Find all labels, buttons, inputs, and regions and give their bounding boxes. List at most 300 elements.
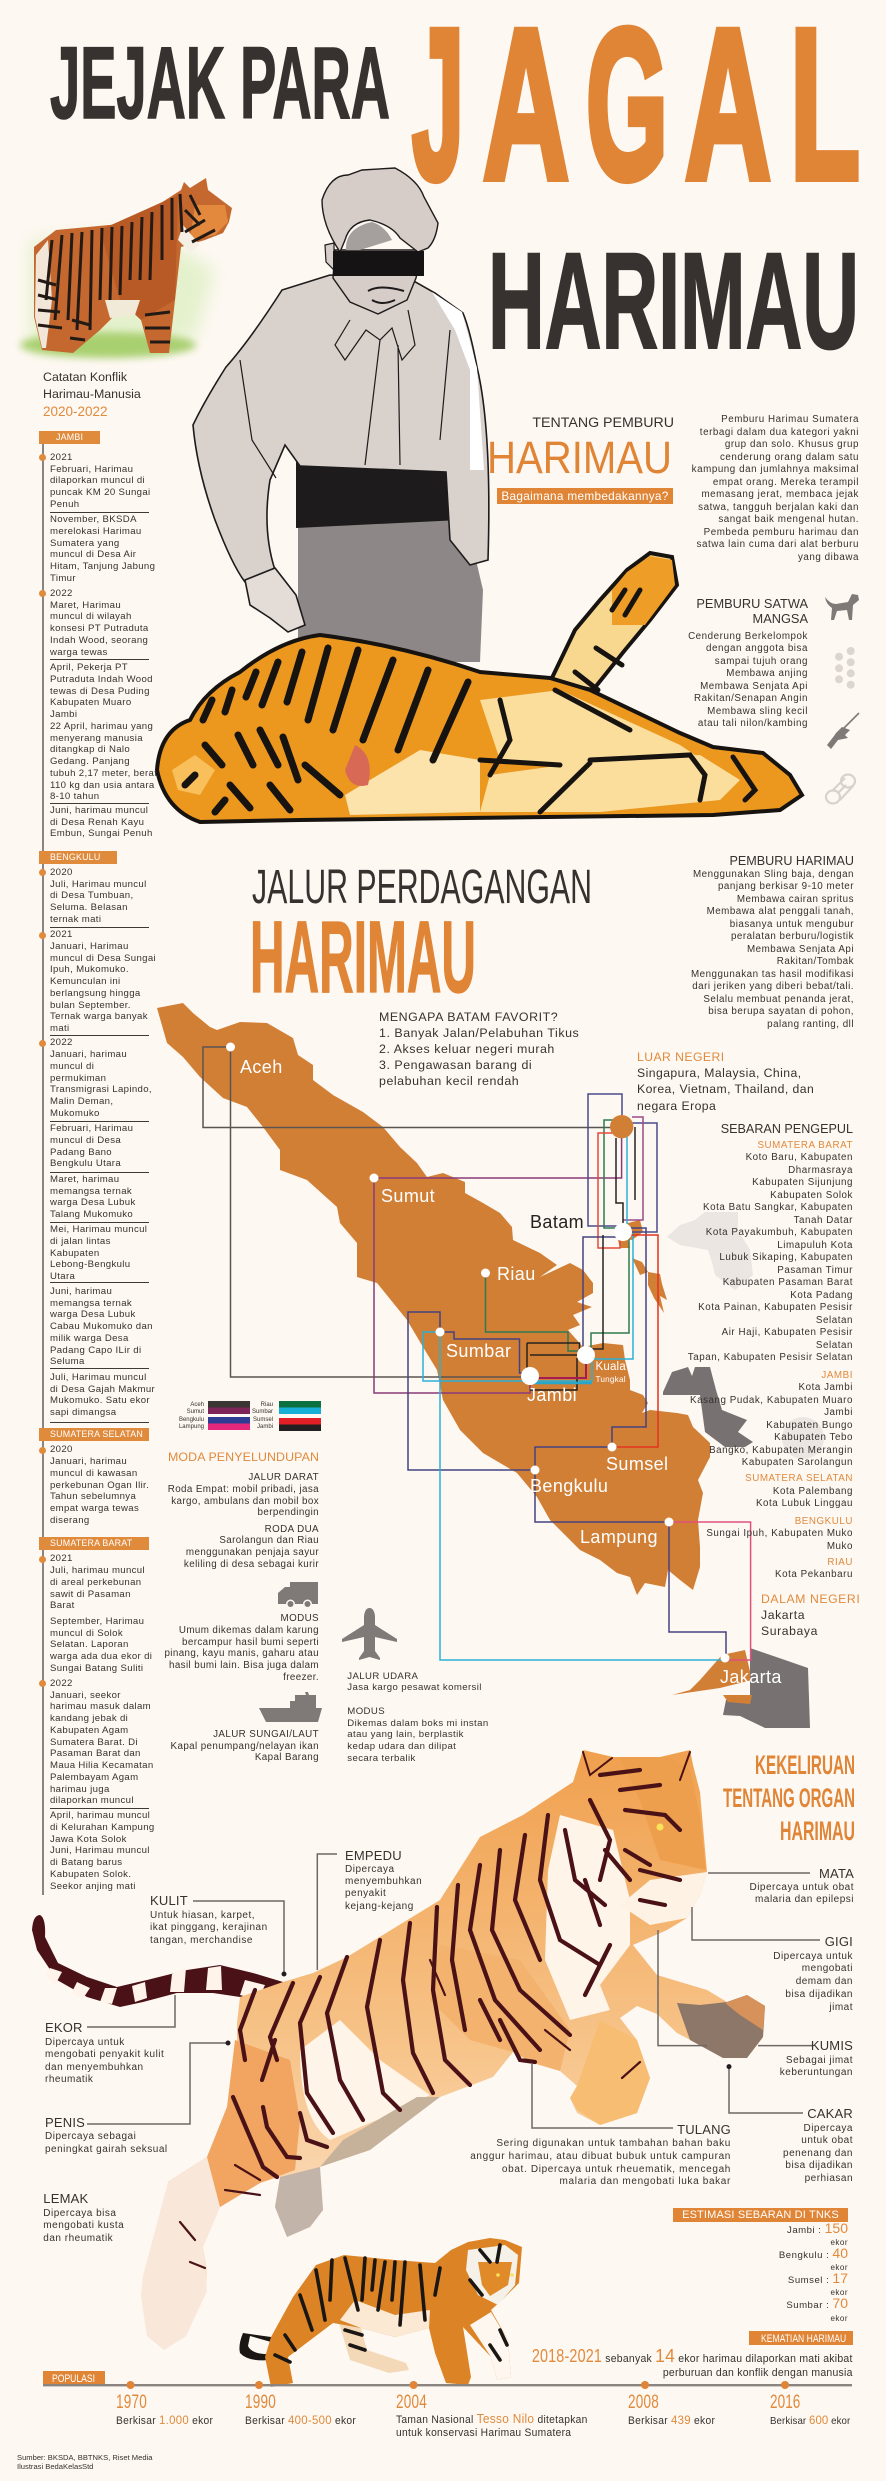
stripes [180,1752,690,2268]
text: about tiger hunters: sangat baik mengenal hutan. [718,514,859,525]
text: jalur darat [168,1472,319,1519]
text: jalur darat: kargo, ambulans dan mobil box [171,1496,319,1507]
text: sumatera barat collectors: Koto Baru, Kabupaten [746,1152,853,1163]
callout: kulit: KULIT [150,1893,188,1908]
trousers grey legs [298,500,483,662]
illustration: walking tiger [235,2235,527,2390]
text: juli bengkulu: sapi dimangsa [50,1407,116,1418]
timeline spine [42,444,44,1895]
text: jalur udara: secara terbalik [347,1753,416,1764]
text: februari [50,1123,133,1169]
text: bengkulu 2022 [50,1037,152,1119]
callout: penis [45,2115,168,2156]
legend labels sumsel [247,1417,273,1430]
text: april: menyerang manusia [50,733,143,744]
sidebar heading: conflict records [43,370,141,419]
text: dalam negeri: DALAM NEGERI [761,1592,860,1606]
text: april: 8-10 tahun [50,791,99,802]
text: jambi collectors: Jambi [824,1407,853,1418]
callout: lemak: mengobati kusta [43,2220,124,2231]
text: mei: Utara [50,1271,75,1282]
text: sumbar 2022: harimau masuk dalam [50,1701,151,1712]
text: november: muncul di Desa Air [50,549,136,560]
text: november: Timur [50,573,76,584]
text: sumsel 2020: diserang [50,1515,90,1526]
text: bengkulu 2022: Januari, harimau [50,1049,127,1060]
text: april: ditangkap di Nalo [50,744,130,755]
title: jagal [411,20,860,188]
rule [50,512,149,513]
text: sumatera barat collectors: SUMATERA BARAT [757,1140,853,1150]
map label: jakarta: Jakarta [720,1667,782,1687]
heading: sumatera barat: SUMATERA BARAT [50,1538,132,1548]
text: jalur sungai laut: Kapal penumpang/nelayan ikan [171,1741,319,1752]
text: bengkulu 2021: berlangsung hingga [50,988,141,999]
timeline entry 2008: Berkisar 439 ekor [628,2413,715,2427]
text: bengkulu 2020: Juli, Harimau muncul [50,879,147,890]
text: bengkulu collectors: Sungai Ipuh, Kabupaten Muko [706,1528,853,1539]
text: juni: Juni, harimau muncul [50,805,148,816]
timeline entry 2016 [770,2393,850,2429]
heading: pemburu satwa mangsa: PEMBURU SATWA [696,596,808,611]
tail [32,1915,283,2007]
text: modus darat [164,1613,319,1684]
text: about tiger hunters: satwa, tangguh berjalan kaki dan [698,502,859,512]
rule [50,803,149,804]
legend labels riau: Riau [261,1402,273,1408]
text: luar negeri: Korea, Vietnam, Thailand, dan [637,1082,814,1096]
text: september: September, Harimau [50,1616,144,1627]
text: pemburu satwa mangsa: Rakitan/Senapan Angin [694,693,808,704]
text: jalur darat: Roda Empat: mobil pribadi, jasa [168,1484,319,1495]
text: sumbar 2021: Barat [50,1600,75,1611]
heading: bengkulu: BENGKULU [50,852,100,862]
legend labels riau [247,1402,273,1415]
text: sumatera barat collectors: Air Haji, Kabupaten Pesisir [722,1327,853,1338]
map: riau islands [618,1218,670,1318]
text: modus darat: MODUS [281,1613,319,1624]
callout: empedu [345,1848,422,1913]
callout: tulang: Sering digunakan untuk tambahan bahan baku [496,2138,731,2149]
rule [50,1121,149,1122]
legend swatch bengkulu lampung [208,1417,250,1430]
heading: kekeliruan tentang organ harimau [720,1750,858,1844]
text: tiger deaths [530,2349,853,2379]
text: bengkulu collectors [706,1516,853,1553]
callout: empedu: penyakit [345,1888,386,1899]
chart: smuggling routes [200,1040,762,1665]
text: april: Putraduta Indah Wood [50,674,153,685]
text: maret: memangsa ternak [50,1186,132,1197]
sidebar heading: conflict records: Catatan Konflik [43,370,127,384]
text: februari: Padang Bano [50,1147,112,1158]
text: pemburu satwa mangsa: sampai tujuh orang [715,656,808,666]
list: pemburu harimau traits: Rakitan/Tombak [777,956,854,967]
text: bengkulu 2021: bulan September. [50,1000,131,1011]
callout: ekor: mengobati penyakit kulit [45,2049,164,2060]
text: why batam: 3. Pengawasan barang di [379,1058,532,1072]
text: sumatera barat collectors: Kabupaten Sijunjung [752,1177,853,1188]
text: april: tewas di Desa Puding [50,686,150,697]
shirt [193,275,489,582]
rule [50,1035,149,1036]
text: juni bengkulu: Seluma [50,1356,85,1367]
dot 2021 [39,1556,46,1563]
timeline entry 1970 [116,2393,213,2428]
callout: kumis: keberuntungan [780,2067,853,2078]
heading: jambi [39,431,100,444]
text: about tiger hunters: memasang jerat, membaca jejak [701,489,859,500]
text: april sumbar [50,1810,155,1892]
text: pemburu satwa mangsa: Membawa Senjata Api [700,680,808,692]
route: aceh [203,1047,622,1377]
text: modus darat: freezer. [283,1672,319,1683]
legend labels bengkulu: Bengkulu [179,1417,204,1423]
text: juni bengkulu: warga Desa Lubuk [50,1309,136,1320]
callout: tulang: obat. Dipercaya untuk rheuematik, mencegah [502,2164,731,2175]
map label: sumbar: Sumbar [446,1341,511,1361]
heading: pemburu satwa mangsa [696,596,808,626]
text: sumbar 2022: harimau juga [50,1784,110,1795]
text: juli bengkulu: Juli, Harimau muncul [50,1372,147,1383]
list: pemburu harimau traits: dari jeriken yang diberi bebat/tali. [692,981,854,992]
text: bengkulu 2020: Seluma. Belasan [50,902,128,913]
icon: rope [825,773,856,804]
text: juli bengkulu [50,1372,155,1418]
text: sumatera barat collectors: Kota Payakumbuh, Kabupaten [706,1227,853,1238]
text: roda dua: keliling di desa sebagai kurir [184,1559,319,1570]
timeline entry 2016: Berkisar 600 ekor [770,2413,850,2427]
text: bengkulu collectors: BENGKULU [795,1516,853,1526]
callout: tulang: malaria dan mengobati luka bakar [560,2176,731,2187]
chart: population timeline axis [43,2380,853,2390]
legend swatch aceh sumut [208,1401,250,1414]
text: about tiger hunters: Pembeda pemburu harimau dan [704,526,859,538]
heading: pemburu harimau: PEMBURU HARIMAU [729,854,854,868]
heading: sumatera selatan [39,1428,149,1441]
callout: empedu: Dipercaya [345,1864,395,1875]
text: mei [50,1224,147,1282]
text: modus darat: hasil bumi lain. Bisa juga dalam [169,1660,319,1671]
callout: mata: MATA [819,1866,854,1881]
text: sumatera barat collectors: Kota Painan, Kabupaten Pesisir [698,1302,853,1313]
text: luar negeri: LUAR NEGERI [637,1050,725,1064]
hair [322,168,438,252]
text: sumbar 2022: kandang jebak di [50,1713,128,1724]
decorative grey region blobs [663,1212,824,1459]
text: pemburu satwa mangsa [688,630,808,729]
text: april: 110 kg dan usia antara [50,780,155,791]
callout: ekor: dan menyembuhkan [45,2062,144,2073]
text: sumbar 2021: Juli, harimau muncul [50,1565,145,1576]
callout: mata: Dipercaya untuk obat [749,1882,854,1893]
callout: mata [749,1866,854,1906]
text: roda dua: menggunakan penjaja sayur [186,1547,319,1558]
text: why batam [379,1009,579,1089]
text: riau collectors: RIAU [827,1556,853,1568]
timeline entry 1990 [245,2393,356,2428]
text: jambi collectors: Kota Jambi [798,1382,853,1393]
source credits [17,2452,152,2470]
text: jambi 2021 [50,452,151,510]
list: pemburu harimau traits: Membawa cairan spritus [737,894,854,905]
callout: ekor: EKOR [45,2020,83,2035]
white belly and shoulder [300,1815,630,2140]
text: juni bengkulu: Padang Capo ILir di [50,1345,141,1356]
callout: gigi: GIGI [825,1934,853,1949]
heading: pemburu satwa mangsa: MANGSA [753,611,808,626]
black trousers top [296,462,460,528]
text: jambi collectors: Bangko, Kabupaten Merangin [709,1444,853,1456]
text: bengkulu 2020: di Desa Tumbuan, [50,890,133,901]
text: april sumbar: di Kelurahan Kampung [50,1822,155,1833]
text: jambi collectors: Kabupaten Bungo [766,1420,853,1430]
panel: conflict timeline sidebar [39,431,157,1895]
text: jalur udara: Dikemas dalam boks mi instan [347,1718,489,1729]
text: juni [50,805,153,839]
text: april sumbar: Kabupaten Solok. [50,1869,131,1880]
text: pemburu satwa mangsa: Membawa anjing [726,668,808,679]
text: juni bengkulu [50,1286,153,1367]
black eye bar [333,251,424,276]
text: april sumbar: April, harimau muncul [50,1810,150,1821]
text: sumbar 2022 [50,1678,154,1806]
illustration: dead tiger lying down [155,550,805,824]
timeline entry 2004: Taman Nasional Tesso Nilo ditetapkan [396,2412,587,2426]
icon: rifle [827,712,860,749]
text: februari: Bengkulu Utara [50,1158,121,1169]
timeline entry 1970: 1970 [116,2392,147,2413]
text: april [50,662,157,802]
text: jambi 2022: Maret, Harimau [50,600,121,611]
text: september: warga ada dua ekor di [50,1651,152,1662]
text: sumatera barat collectors: Selatan [816,1340,853,1350]
text: sumbar 2021: 2021 [50,1553,73,1564]
stats: tiger estimates: Jambi : 150 [787,2220,848,2236]
text: bengkulu collectors: Muko [827,1540,853,1552]
text: november: Sumatera yang [50,538,120,549]
text: bengkulu 2021: Januari, Harimau [50,941,129,952]
text: riau collectors: Kota Pekanbaru [775,1569,853,1580]
timeline entry 2004 [396,2393,587,2440]
timeline entry 2008 [628,2393,715,2428]
callout: cakar: penenang dan [783,2148,853,2158]
text: bengkulu 2021: muncul di Desa Sungai [50,953,156,964]
text: bengkulu 2022: Malin Deman, [50,1096,113,1107]
sidebar heading: conflict records: Harimau-Manusia [43,387,141,401]
text: pemburu harimau [691,854,854,1030]
timeline entry 1970: Berkisar 1.000 ekor [116,2413,213,2427]
text: tiger deaths: sebanyak 14 ekor harimau dilaporkan mati akibat [606,2346,853,2366]
heading: bengkulu [39,851,117,864]
heading: moda penyelundupan: MODA PENYELUNDUPAN [168,1450,319,1464]
neck and face [333,250,422,314]
list: pemburu harimau traits: palang ranting, dll [767,1019,854,1030]
callout: gigi: jimat [829,2002,853,2013]
map label: bengkulu: Bengkulu [530,1476,608,1496]
text: tiger deaths: 2018-2021 [532,2346,602,2366]
dot 2020 [39,869,46,876]
text: november [50,514,155,584]
dot 2022 [39,590,46,597]
text: about tiger hunters: Pemburu Harimau Sumatera [721,414,859,425]
text: sumsel collectors: Kota Lubuk Linggau [756,1498,853,1509]
rule [50,1222,149,1223]
callout: ekor [45,2020,164,2087]
text: about tiger hunters: terbagi dalam dua kategori yakni [700,426,859,438]
callout: gigi: mengobati [802,1963,853,1974]
text: sumbar 2021: sawit di Pasaman [50,1589,131,1600]
list: pemburu harimau traits: Menggunakan Sling baja, dengan [693,869,854,880]
text: about tiger hunters: yang dibawa [798,552,859,562]
text: bengkulu 2021: Ternak warga banyak [50,1011,148,1022]
text: sumbar 2022: Kabupaten Agam [50,1725,129,1736]
legend labels left: Aceh [190,1402,204,1408]
list: pemburu harimau traits: peralatan berburu/logistik [731,931,854,942]
text: about tiger hunters: grup dan solo. Khusus grup [725,439,859,450]
text: sumsel 2020: perkebunan Ogan Ilir. [50,1480,149,1491]
text: bengkulu 2022: muncul di [50,1061,94,1072]
text: sumatera barat collectors: Lubuk Sikaping, Kabupaten [719,1252,853,1263]
text: sumatera barat collectors [688,1140,853,1364]
text: sumatera barat collectors: Kabupaten Solok [770,1190,853,1200]
text: jambi 2022: warga tewas [50,647,108,658]
text: juni: di Desa Renah Kayu [50,817,144,828]
rule [50,1172,149,1173]
text: jalur udara: atau yang lain, berplastik [347,1729,464,1740]
text: juni bengkulu: memangsa ternak [50,1298,132,1309]
callout: lemak: LEMAK [43,2191,88,2206]
text: februari: muncul di Desa [50,1135,121,1146]
text: jalur sungai laut: JALUR SUNGAI/LAUT [213,1729,319,1740]
callout: gigi [773,1934,853,2014]
text: jambi collectors: Kasang Pudak, Kabupaten Muaro [690,1394,853,1406]
text: bengkulu 2021: mati [50,1023,70,1034]
text: maret: warga Desa Lubuk [50,1197,136,1208]
text: jalur sungai laut [171,1729,319,1764]
list: pemburu harimau traits: bisa berupa sayatan di pohon, [708,1006,854,1017]
list: pemburu harimau traits: Menggunakan tas hasil modifikasi [691,969,854,980]
list: pemburu harimau traits: Membawa alat penggali tanah, [707,906,854,917]
map label: lampung: Lampung [580,1527,658,1547]
list: pemburu harimau traits: panjang berkisar 9-10 meter [718,881,854,892]
text: jalur udara: Jasa kargo pesawat komersil [347,1682,482,1693]
text: roda dua: RODA DUA [265,1524,319,1535]
text: april: Gedang. Panjang [50,756,130,767]
callout: kulit: tangan, merchandise [150,1935,253,1946]
stats: tiger estimates: Bengkulu : 40 [779,2245,848,2261]
text: about tiger hunters: satwa lain cuma dari alat berburu [697,539,859,550]
rule [50,1422,149,1423]
callout: kumis: KUMIS [811,2038,853,2053]
text: why batam: pelabuhan kecil rendah [379,1074,519,1088]
callout: lemak [43,2191,124,2245]
text: sumatera barat collectors: Pasaman Timur [777,1264,853,1276]
text: mei: Lebong-Bengkulu [50,1259,130,1270]
text: luar negeri: negara Eropa [637,1099,716,1113]
dot 2021 [39,454,46,461]
text: september [50,1616,152,1674]
text: mei: Kabupaten [50,1248,100,1259]
source credits: Ilustrasi BedaKelasStd [17,2462,93,2470]
text: sumbar 2022: dilaporkan muncul [50,1795,134,1806]
text: sumbar 2022: Sumatera Barat. Di [50,1737,138,1748]
text: jalur darat: berpendingin [258,1507,319,1518]
callout: cakar: CAKAR [807,2106,853,2121]
stats: tiger estimates [779,2225,848,2325]
illustration: masked poacher kneeling [192,167,490,662]
text: roda dua: Sarolangun dan Riau [219,1535,319,1546]
text: juni: Embun, Sungai Penuh [50,828,153,839]
stats: tiger estimates: ekor [830,2288,848,2297]
text: pemburu satwa mangsa: Cenderung Berkelompok [688,630,808,642]
text: jalur sungai laut: Kapal Barang [255,1752,319,1763]
text: april: Jambi [50,709,77,720]
text: jambi 2022: Indah Wood, seorang [50,635,148,646]
heading: sumatera barat [39,1537,149,1550]
stats: tiger estimates: Sumsel : 17 [788,2270,848,2286]
callout: penis: Dipercaya sebagai [45,2131,136,2142]
icon: plane [341,1607,398,1662]
text: modus darat: pinang, kayu manis, gaharu atau [164,1648,319,1659]
text: bengkulu 2021 [50,929,156,1034]
text: april sumbar: Juni, Harimau muncul [50,1845,150,1856]
rule [50,1808,149,1809]
heading: jambi: JAMBI [56,432,83,442]
text: maret: Talang Mukomuko [50,1209,133,1220]
legend labels sumsel: Jambi [257,1424,273,1430]
stats: tiger estimates: ekor [830,2263,848,2272]
text: sumatera barat collectors: Kota Padang [790,1290,853,1300]
callout: kulit: ikat pinggang, kerajinan [150,1922,268,1933]
text: sumatera barat collectors: Kota Batu Sangkar, Kabupaten [703,1202,853,1213]
timeline entry 2008: 2008 [628,2392,659,2413]
map: java [670,1640,812,1732]
text: about tiger hunters: cenderung orang dalam satu [720,452,859,462]
stats: tiger estimates: ekor [830,2238,848,2247]
text: jambi 2022: 2022 [50,588,73,599]
text: jambi collectors: Kabupaten Tebo [774,1432,853,1443]
text: sumsel 2020: empat warga tewas [50,1503,139,1514]
timeline entry 2004: untuk konservasi Harimau Sumatera [396,2427,571,2439]
callout: ekor: rheumatik [45,2074,93,2085]
text: bengkulu 2020: ternak mati [50,914,101,925]
heading: sebaran pengepul: SEBARAN PENGEPUL [721,1122,853,1136]
text: riau collectors [775,1556,853,1582]
text: sumsel collectors: SUMATERA SELATAN [745,1473,853,1484]
callout: empedu: EMPEDU [345,1848,402,1862]
text: april: April, Pekerja PT [50,662,128,673]
rule [50,927,149,928]
illustration: standing tiger on grass [16,178,232,364]
text: jambi 2022: muncul di wilayah [50,611,132,622]
legend labels left: Sumut [187,1408,204,1414]
legend swatch riau sumbar [279,1401,321,1414]
dot 2022 [39,1040,46,1047]
heading bar: kematian harimau: KEMATIAN HARIMAU [761,2333,846,2345]
text: jambi 2021: Penuh [50,499,80,510]
heading bar: estimasi sebaran: ESTIMASI SEBARAN DI TNKS [682,2209,839,2221]
text: februari: Februari, Harimau [50,1123,133,1134]
callout: lemak: dan rheumatik [43,2232,113,2244]
text: sumatera barat collectors: Tanah Datar [794,1214,853,1226]
text: april sumbar: Seekor anjing mati [50,1881,136,1892]
text: november: November, BKSDA [50,514,137,525]
text: juni bengkulu: Juni, harimau [50,1286,112,1297]
map markers [220,1036,740,1671]
text: jambi 2021: Februari, Harimau [50,464,133,475]
callout: cakar: untuk obat [801,2135,853,2146]
